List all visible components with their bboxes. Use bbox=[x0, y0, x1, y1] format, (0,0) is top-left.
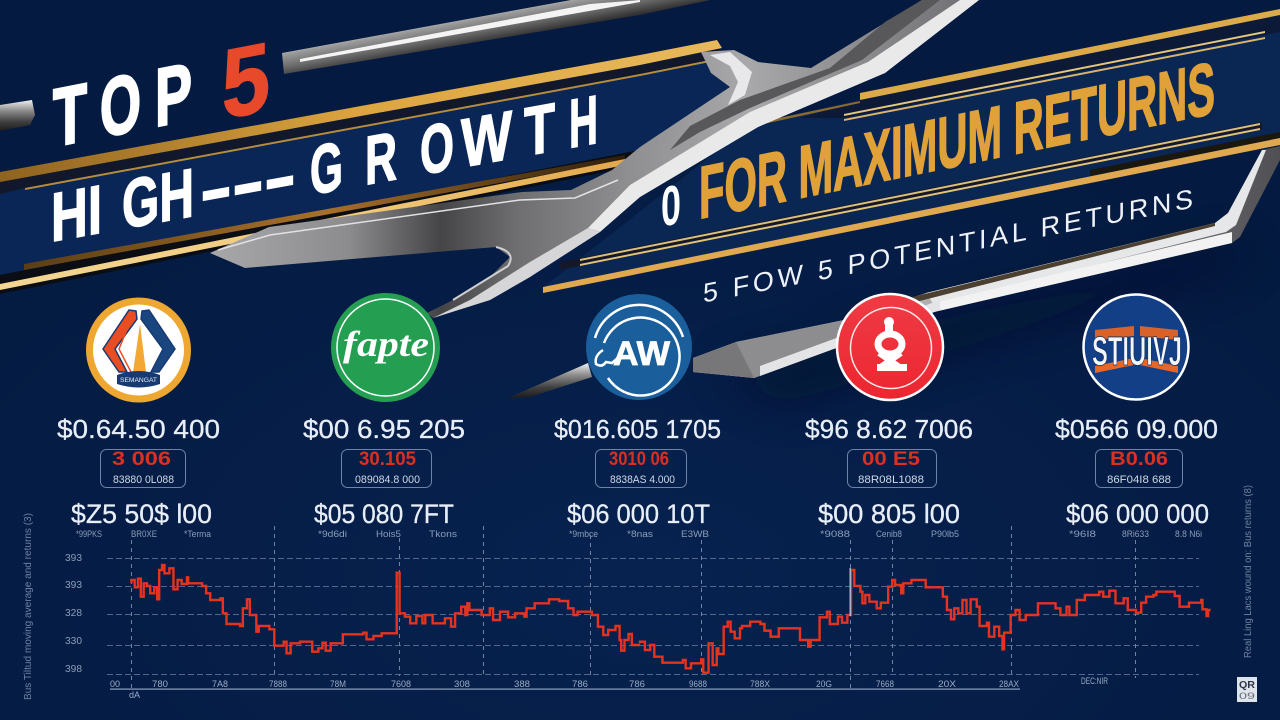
price row two bbox=[71, 499, 1209, 529]
x axis line and labels: 7668 bbox=[876, 679, 894, 689]
small labels row: P90lb5 bbox=[931, 529, 959, 539]
stat box five: 86F04I8 688 bbox=[1107, 474, 1171, 486]
small labels row: Cenib8 bbox=[876, 529, 902, 539]
icon: logo two green: fapte bbox=[343, 324, 429, 364]
icon: logo two green bbox=[331, 293, 440, 402]
title: HIGH---GROWTH: R bbox=[365, 117, 397, 200]
stat box four: 88R08L1088 bbox=[858, 474, 924, 486]
title: HIGH---GROWTH: T bbox=[524, 88, 555, 171]
stat box four bbox=[848, 449, 936, 488]
stat box three: 3010 06 bbox=[609, 449, 669, 470]
x axis line and labels: dA bbox=[129, 690, 140, 700]
metal bar: upper left bbox=[0, 0, 710, 131]
x axis line and labels: 28AX bbox=[999, 679, 1019, 689]
price row one: $96 8.62 7006 bbox=[805, 414, 973, 444]
banner: left gold band bbox=[0, 40, 730, 294]
x axis line and labels: DEC:NIR bbox=[1081, 676, 1108, 686]
qr code: 09 bbox=[1239, 691, 1255, 701]
title: HIGH---GROWTH: HI bbox=[51, 170, 102, 257]
metal hook lower right bbox=[693, 146, 1280, 378]
y axis labels: 328 bbox=[65, 608, 82, 619]
stat box two bbox=[342, 449, 432, 488]
small labels row: *Terma bbox=[184, 529, 211, 539]
small labels row: *9d6di bbox=[318, 529, 347, 539]
small labels row: E3WB bbox=[681, 529, 709, 539]
stat box one bbox=[100, 449, 186, 488]
title: HIGH---GROWTH: G bbox=[310, 126, 343, 210]
subtitle: 5 FOW 5 POTENTIAL RETURNS bbox=[703, 183, 1193, 309]
icon: logo five STIUIVJ: STIUIVJ bbox=[1092, 328, 1182, 374]
icon: logo three AW bbox=[586, 294, 692, 400]
price row one: $016.605 1705 bbox=[554, 414, 721, 444]
title: HIGH---GROWTH: --- bbox=[200, 135, 296, 230]
stat box two: 089084.8 000 bbox=[355, 474, 420, 486]
x axis line and labels: 308 bbox=[454, 679, 470, 689]
y axis labels: 330 bbox=[65, 636, 82, 647]
price row one: $0.64.50 400 bbox=[57, 414, 220, 444]
x axis line and labels: 7608 bbox=[391, 679, 411, 689]
stat box five: B0.06 bbox=[1110, 449, 1168, 470]
price row two: $Z5 50$ l00 bbox=[71, 499, 212, 529]
line chart bbox=[65, 526, 1211, 700]
stat box three: 8838AS 4.000 bbox=[610, 474, 675, 486]
title: HIGH---GROWTH: GH bbox=[122, 153, 194, 244]
y axis labels: 398 bbox=[65, 664, 82, 675]
x axis line and labels: 9688 bbox=[689, 679, 707, 689]
price line grey divider bbox=[850, 568, 851, 616]
small labels row: 8.8 N6i bbox=[1175, 529, 1202, 539]
title: white 0: 0 bbox=[661, 172, 681, 239]
x axis line and labels: 00 bbox=[110, 679, 120, 689]
small labels row: 8Ri633 bbox=[1122, 529, 1149, 539]
qr code: QR bbox=[1239, 680, 1256, 691]
title: HIGH---GROWTH: O bbox=[420, 106, 454, 190]
stat box two: 30.105 bbox=[359, 449, 416, 470]
title: HIGH---GROWTH bbox=[51, 80, 598, 257]
stat box one: 3 006 bbox=[112, 449, 171, 470]
x axis line and labels: 388 bbox=[514, 679, 530, 689]
title: TOP: O bbox=[100, 55, 141, 155]
x axis line and labels: 7A8 bbox=[212, 679, 228, 689]
x axis line and labels: 780 bbox=[152, 679, 168, 689]
icon: logo one nib: SEMANGAT bbox=[120, 378, 157, 384]
metal Y shape centre bbox=[210, 0, 979, 318]
x axis line and labels: 786 bbox=[629, 679, 645, 689]
banner: right gold band bbox=[540, 9, 1280, 293]
stat box one: 83880 0L088 bbox=[113, 474, 174, 486]
title: HIGH---GROWTH: H bbox=[569, 80, 598, 163]
price row two: $05 080 7FT bbox=[314, 499, 454, 529]
right vertical axis caption: Real Ling Lacs wound on: Bus returns (8) bbox=[1243, 485, 1254, 658]
x axis line and labels: 7888 bbox=[269, 679, 287, 689]
price row one bbox=[57, 414, 1218, 444]
price row two: $06 000 000 bbox=[1066, 499, 1209, 529]
small labels row: BR0XE bbox=[131, 529, 157, 539]
price row one: $00 6.95 205 bbox=[303, 414, 465, 444]
red price line left bbox=[131, 565, 640, 653]
x axis line and labels: 78M bbox=[330, 679, 346, 689]
stat box five bbox=[1096, 449, 1182, 488]
x axis line and labels: 20X bbox=[938, 679, 956, 689]
icon: logo four red bbox=[837, 294, 943, 400]
title: HIGH---GROWTH: W bbox=[461, 96, 512, 182]
stat box four: 00 E5 bbox=[862, 449, 921, 470]
x axis line and labels bbox=[110, 676, 1108, 700]
y axis labels: 393 bbox=[65, 553, 82, 564]
stat box three bbox=[596, 449, 686, 488]
small labels row: *96I8 bbox=[1069, 529, 1096, 539]
red price line right bbox=[640, 570, 1211, 673]
small labels row: *9mbce bbox=[569, 529, 598, 539]
small labels row: Hois5 bbox=[376, 529, 401, 539]
icon: logo three AW: AW bbox=[613, 335, 671, 373]
left vertical axis caption: Bus Tiltud moving average and returns (3) bbox=[23, 513, 34, 700]
x axis line and labels: 788X bbox=[750, 679, 770, 689]
title: TOP: T bbox=[53, 66, 87, 164]
shadow under lower metal bbox=[720, 245, 1240, 405]
icon: logo five STIUIVJ bbox=[1084, 294, 1188, 400]
icon: logo one nib bbox=[90, 301, 188, 399]
price row one: $0566 09.000 bbox=[1055, 414, 1218, 444]
x axis line and labels: 786 bbox=[572, 679, 588, 689]
y axis labels bbox=[65, 553, 82, 675]
small labels row: *8nas bbox=[627, 529, 654, 539]
small labels row bbox=[76, 529, 1202, 539]
title: red 5: 5 bbox=[222, 21, 270, 140]
price row two: $06 000 10T bbox=[567, 499, 710, 529]
y axis labels: 393 bbox=[65, 580, 82, 591]
title: TOP bbox=[53, 45, 192, 164]
price row two: $00 805 l00 bbox=[818, 499, 960, 529]
small labels row: *99PKS bbox=[76, 529, 102, 539]
qr code bbox=[1237, 677, 1257, 702]
title: TOP: P bbox=[155, 45, 192, 144]
small labels row: *9088 bbox=[820, 529, 850, 539]
metal blade near logo three bbox=[508, 363, 592, 398]
x axis line and labels: 20G bbox=[816, 679, 832, 689]
small labels row: Tkons bbox=[429, 529, 458, 539]
